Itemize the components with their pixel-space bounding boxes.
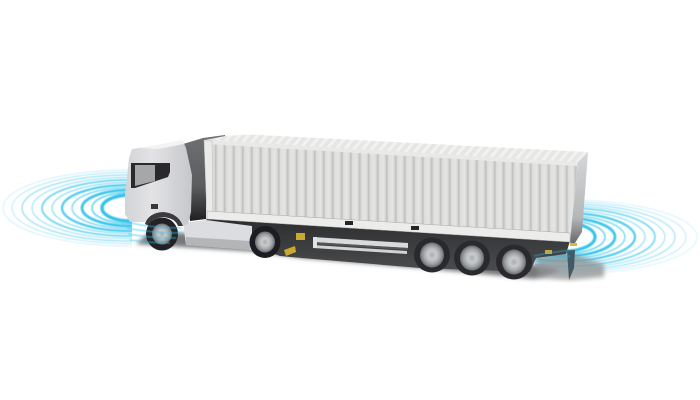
cab vent xyxy=(151,204,158,209)
fuel tank and step xyxy=(183,220,252,250)
cab body xyxy=(125,141,192,226)
front waves over wheel xyxy=(127,222,182,243)
cab roof xyxy=(140,140,184,149)
trailer wheel 2 xyxy=(454,240,490,276)
drive wheel xyxy=(250,226,280,258)
ground shadow xyxy=(136,232,604,280)
rail brackets xyxy=(345,221,419,230)
trailer wheel 3 xyxy=(496,244,532,280)
yellow coupling parts xyxy=(284,233,552,256)
side skirt xyxy=(313,237,408,254)
rear waves over axle xyxy=(534,250,572,262)
fairing behind cab xyxy=(183,135,226,221)
trailer wheel 1 xyxy=(414,238,450,272)
truck xyxy=(125,134,588,280)
front wheel xyxy=(146,218,178,250)
rear sensor waves xyxy=(535,200,698,274)
cab xyxy=(125,140,192,226)
container rear face xyxy=(570,152,588,246)
container top frame xyxy=(205,140,578,166)
rear lamp xyxy=(570,243,577,246)
front sensor waves xyxy=(2,169,132,247)
container roof xyxy=(205,134,588,162)
rear underrun leg xyxy=(567,250,575,280)
container end post xyxy=(204,140,213,219)
windscreen reflection xyxy=(135,165,155,186)
container side xyxy=(205,140,578,242)
infographic: truck with sensor waves xyxy=(2,134,698,282)
cab window xyxy=(131,163,170,188)
container bottom rail xyxy=(207,211,570,242)
wheel arch xyxy=(145,212,183,226)
chassis underside xyxy=(205,216,570,272)
